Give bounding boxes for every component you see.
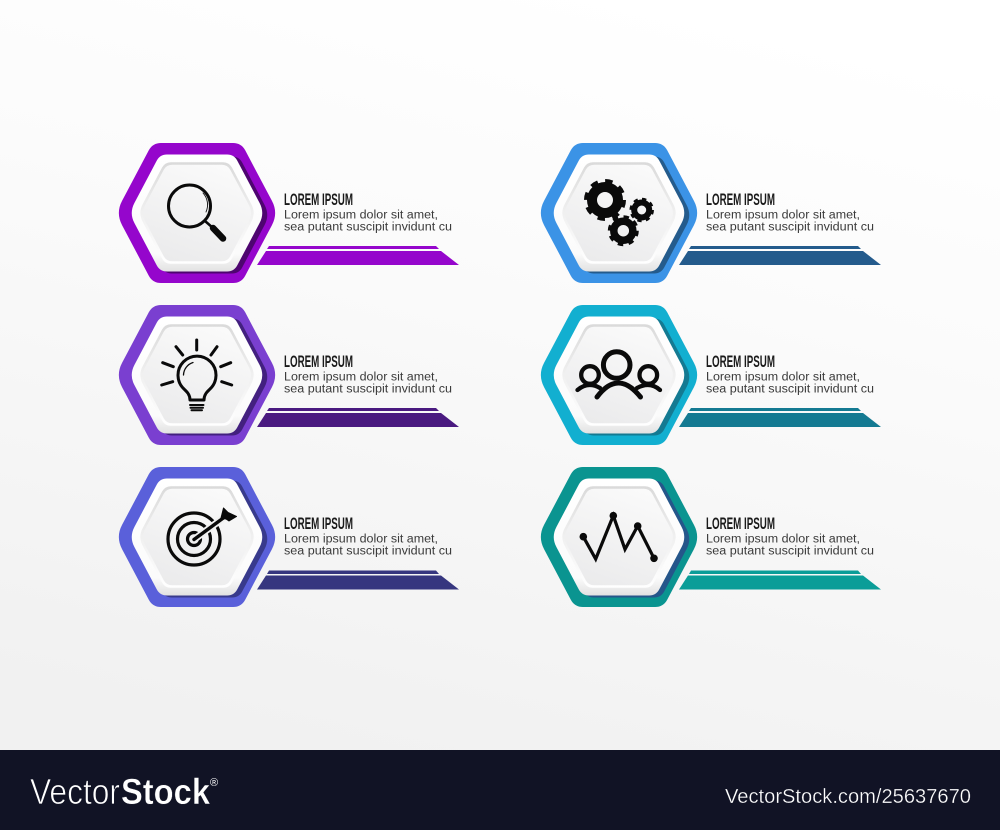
panel: search item [119,143,459,283]
heading: LOREM IPSUM [284,514,353,533]
accent bars [679,570,881,590]
description: sea putant suscipit invidunt cu [706,546,874,558]
panel: chart item [541,467,881,607]
accent bars [679,408,881,427]
footer logo [30,771,218,812]
description: Lorem ipsum dolor sit amet, [284,210,438,222]
hexagon badge: cyan [541,305,697,445]
icon: magnifying glass [168,185,223,238]
accent bars [257,408,459,427]
footer band [0,750,1000,830]
panel: settings item [541,143,881,283]
description: Lorem ipsum dolor sit amet, [706,372,860,384]
icon: light bulb [162,340,232,410]
hexagon badge: violet [119,305,275,445]
description: sea putant suscipit invidunt cu [284,546,452,558]
description: sea putant suscipit invidunt cu [706,384,874,396]
icon: gears [586,182,652,244]
hexagon badge: indigo [119,467,275,607]
description: sea putant suscipit invidunt cu [284,222,452,234]
panel: idea item [119,305,459,445]
description: Lorem ipsum dolor sit amet, [284,534,438,546]
icon: target with arrow [168,508,236,565]
description: sea putant suscipit invidunt cu [284,384,452,396]
description: sea putant suscipit invidunt cu [706,222,874,234]
heading: LOREM IPSUM [706,352,775,371]
footer logo: Vector [30,771,120,812]
heading: LOREM IPSUM [284,352,353,371]
panel: team item [541,305,881,445]
description [706,534,874,558]
footer logo: ® [210,777,218,789]
footer image id: VectorStock.com/25637670 [725,786,971,808]
description [706,372,874,396]
description: Lorem ipsum dolor sit amet, [706,534,860,546]
icon: line chart [580,512,658,562]
hexagon badge: blue [541,143,697,283]
panel: target item [119,467,459,607]
heading: LOREM IPSUM [706,190,775,209]
hexagon badge: teal [541,467,697,607]
heading: LOREM IPSUM [706,514,775,533]
description [284,534,452,558]
icon: group of people [578,352,660,397]
description [706,210,874,234]
description [284,210,452,234]
accent bars [257,246,459,265]
footer logo: Stock [121,771,211,812]
accent bars [257,570,459,590]
description [284,372,452,396]
hexagon badge: purple [119,143,275,283]
description: Lorem ipsum dolor sit amet, [284,372,438,384]
description: Lorem ipsum dolor sit amet, [706,210,860,222]
heading: LOREM IPSUM [284,190,353,209]
accent bars [679,246,881,265]
